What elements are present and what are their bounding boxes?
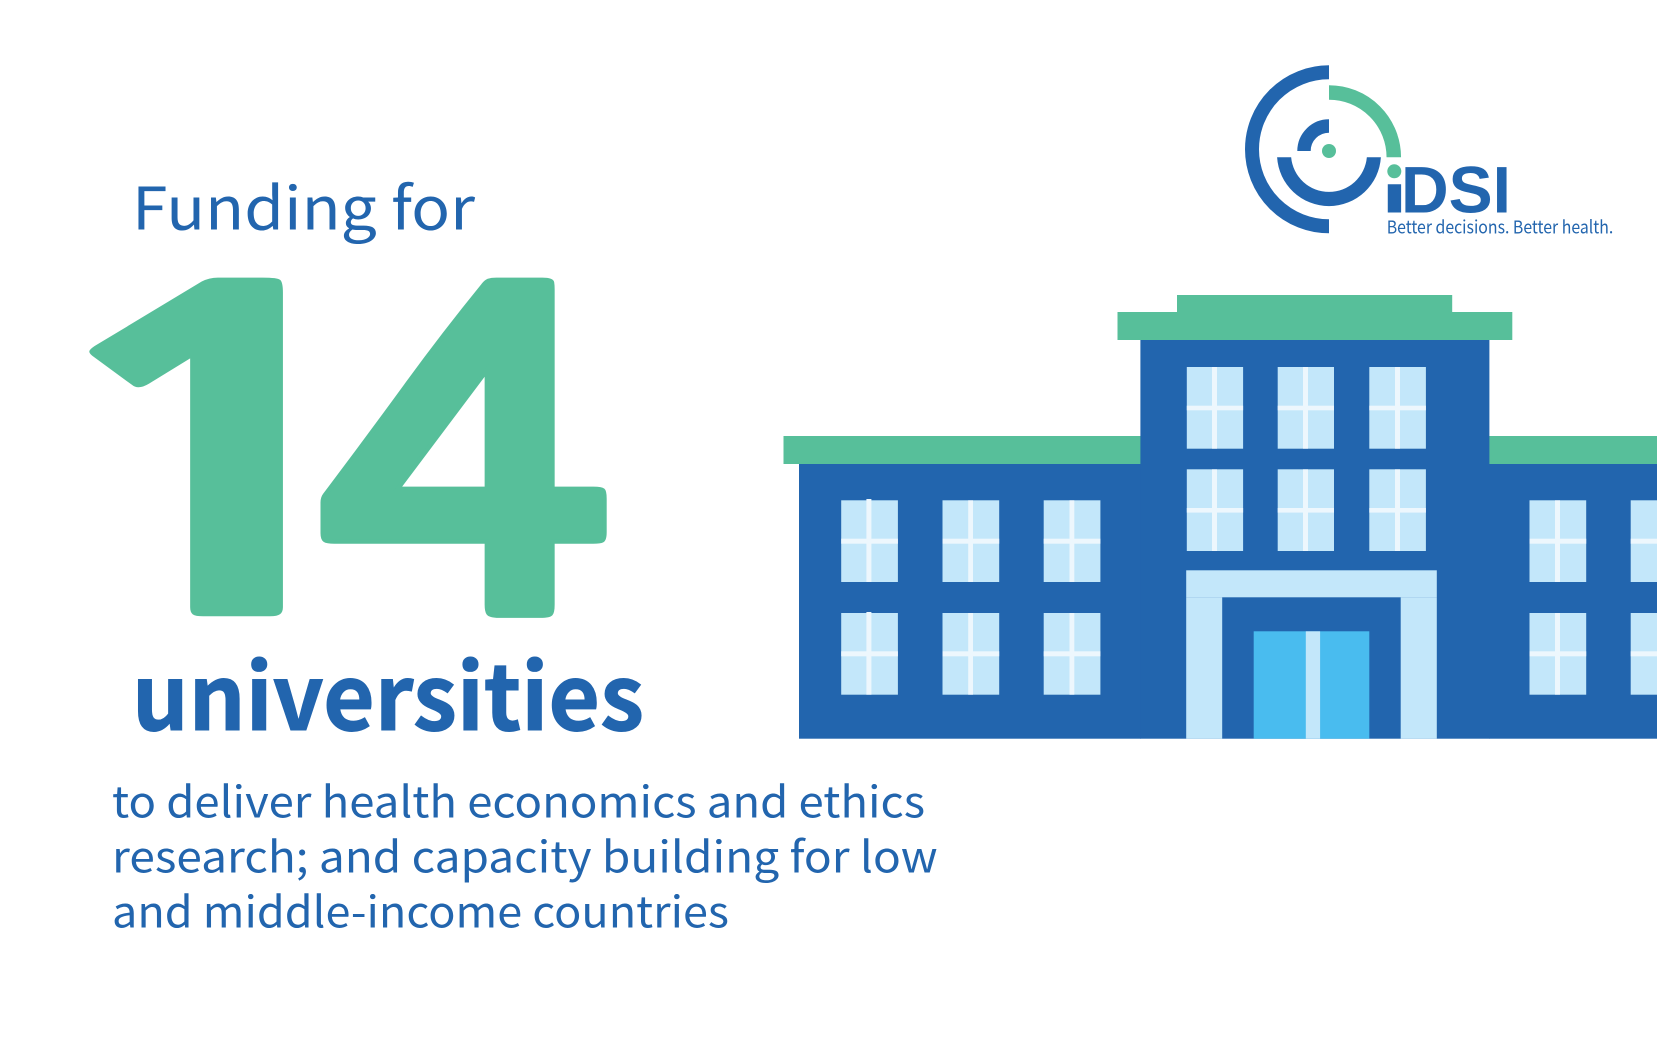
description text: to deliver health economics and ethics [112, 768, 925, 830]
left wing [784, 436, 1141, 739]
infographic canvas [89, 65, 1657, 928]
illustration: university building [784, 295, 1657, 739]
description text [112, 768, 938, 941]
digit 1: 1 [18, 241, 428, 678]
windows: left wing [841, 499, 1100, 695]
digit 4: 4 [311, 244, 614, 676]
logo wordmark [1388, 166, 1507, 213]
heading: Funding for: Funding for [132, 162, 475, 247]
description text: and middle-income countries [112, 879, 729, 941]
logo tagline: Better decisions. Better health. [1387, 213, 1613, 239]
description text: research; and capacity building for low [112, 824, 938, 886]
entrance doors [1254, 631, 1369, 739]
logo wordmark: i [1381, 164, 1408, 224]
logo: iDSI [1252, 72, 1613, 239]
logo wordmark: DSI [1401, 152, 1511, 226]
heading: universities: universities [132, 626, 644, 756]
logo dot on the i [1387, 164, 1401, 178]
central tower [1140, 340, 1489, 739]
tower roof [1118, 295, 1512, 340]
entrance portico [1186, 570, 1437, 739]
big number: 14 [18, 241, 614, 678]
windows: right wing [1530, 500, 1657, 695]
windows: tower [1187, 367, 1426, 551]
logo mark: concentric arcs [1252, 72, 1394, 226]
right wing [1489, 436, 1657, 739]
